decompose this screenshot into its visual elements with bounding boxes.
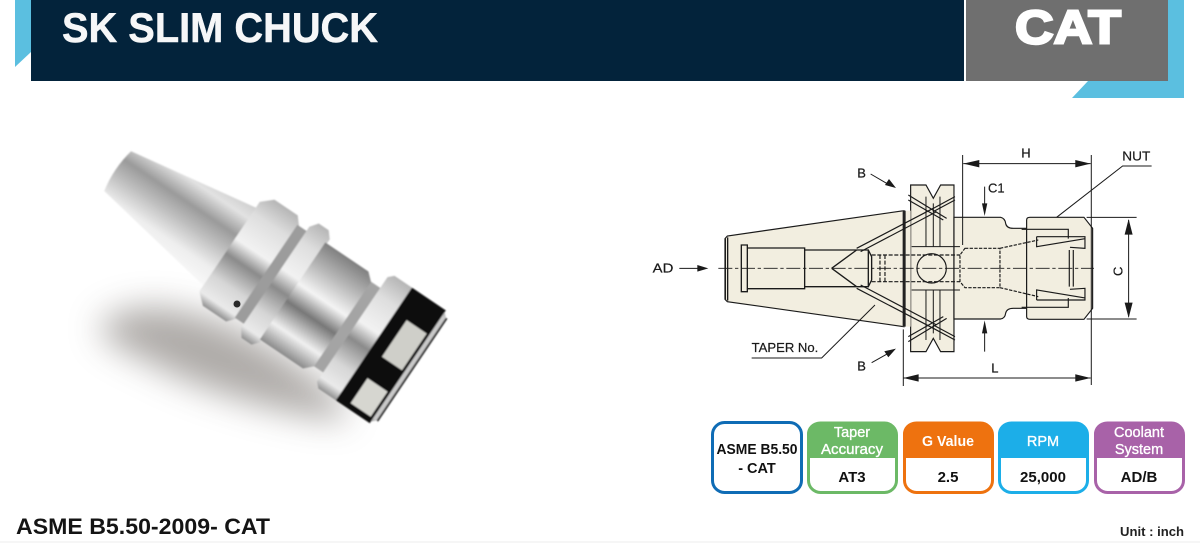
spec card: standard: ASME B5.50: [716, 442, 798, 458]
flange vertical lines: [912, 197, 960, 340]
drawing labels: TAPER No.: [752, 340, 818, 355]
drawing labels: C1: [988, 181, 1005, 196]
flange hole: [234, 300, 240, 308]
drawing labels: AD: [653, 261, 673, 276]
spec card: coolant system: [1094, 422, 1184, 492]
gauge band: [903, 211, 911, 327]
spec card: taper accuracy: [807, 422, 897, 492]
drawing labels: B: [857, 165, 866, 180]
spec card: G value: [903, 422, 993, 492]
dimension arrowheads: [903, 160, 1133, 382]
right cyan ribbon: [1072, 0, 1184, 98]
spec card: standard: [712, 422, 802, 492]
chuck body: [77, 113, 451, 427]
spec card: taper accuracy: AT3: [838, 469, 866, 486]
leader arrowheads: [697, 179, 896, 357]
drawing labels: H: [1021, 146, 1031, 161]
drawing labels: [653, 146, 1150, 376]
product photo: chuck: [77, 113, 451, 427]
leader lines: [679, 166, 1152, 363]
coolant cross lines lower: [857, 285, 955, 342]
spec card: RPM: [998, 422, 1088, 492]
spec card: RPM: 25,000: [1020, 469, 1066, 486]
internal bore lines: [725, 237, 872, 301]
spec card: coolant system: AD/B: [1121, 469, 1157, 486]
spec card: standard: - CAT: [738, 461, 776, 477]
unit note: Unit : inch: [1120, 524, 1184, 539]
category label: CAT: [1015, 0, 1121, 54]
spec card: taper accuracy: Taper: [834, 425, 870, 441]
collet slots and nut internals: [1022, 229, 1085, 307]
category box: [966, 0, 1168, 81]
cast shadow: [100, 307, 346, 420]
standard heading: ASME B5.50-2009- CAT: [16, 514, 271, 539]
centre line: [718, 267, 1094, 270]
drawing labels: L: [991, 361, 999, 376]
nut: [1027, 217, 1093, 319]
spec card: coolant system: System: [1115, 442, 1163, 458]
taper section: [725, 211, 904, 327]
spec card: taper accuracy: Accuracy: [821, 442, 884, 458]
rear collet bore: [960, 240, 1038, 297]
title: SK SLIM CHUCK: [62, 4, 378, 51]
spec card: coolant system: Coolant: [1114, 425, 1164, 441]
spec card: G value: 2.5: [938, 469, 958, 486]
cross hole: [917, 254, 946, 283]
coolant cross lines upper: [857, 195, 955, 252]
drawing labels: C: [1111, 267, 1126, 276]
drawing labels: B: [857, 358, 866, 373]
flange section: [911, 185, 954, 352]
centre drive holes: [872, 255, 960, 282]
dimension lines: [903, 155, 1137, 386]
spec card: G value: G Value: [922, 434, 974, 450]
technical drawing: [653, 146, 1152, 386]
header banner: [31, 0, 964, 81]
drawing labels: NUT: [1122, 149, 1150, 164]
shank body: [954, 217, 1027, 319]
left cyan ribbon: [15, 0, 31, 67]
spec card: RPM: RPM: [1027, 434, 1059, 450]
band stripe: [903, 211, 906, 327]
